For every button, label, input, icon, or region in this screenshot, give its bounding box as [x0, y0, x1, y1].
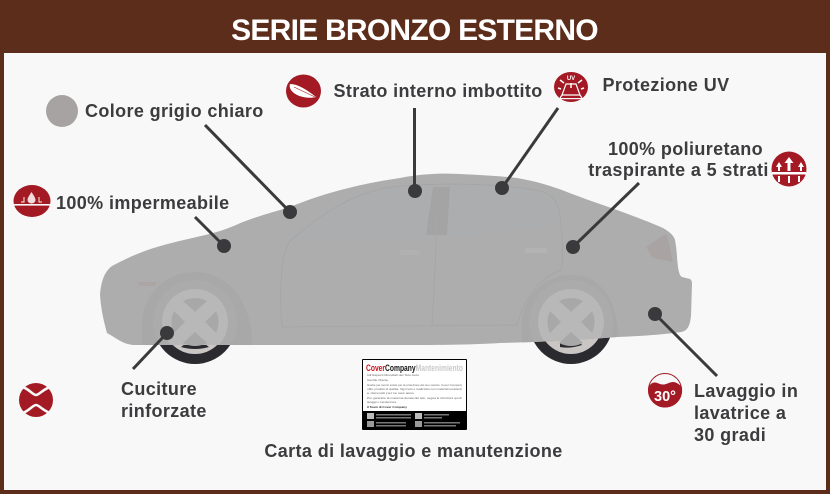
leader lines	[133, 108, 717, 376]
icon: breathable layers	[772, 152, 806, 186]
care card: CoverCompanyMantenimiento	[366, 363, 463, 373]
icon: grey colour swatch	[46, 95, 78, 127]
label: wash	[694, 381, 798, 445]
rear wheel arch	[522, 336, 618, 342]
icon: reinforced seams	[19, 383, 53, 417]
icon: feather	[286, 74, 321, 108]
label: seams	[121, 379, 207, 421]
care card: Gentile Cliente,	[367, 378, 389, 382]
headlight hint	[137, 282, 157, 286]
front wheel arch	[142, 272, 252, 345]
care card: Grazie per averci scelto per la protezione del suo veicolo. Cover Company	[367, 383, 462, 387]
label: colour: Colore grigio chiaro	[85, 101, 264, 121]
label: breathable polyurethane: traspirante a 5 strati	[588, 160, 769, 180]
car body	[100, 174, 692, 345]
icon: 30 degree wash: 30°	[654, 389, 676, 405]
label: breathable polyurethane: 100% poliuretano	[608, 139, 763, 159]
tail light	[646, 235, 673, 262]
label: UV: Protezione UV	[602, 75, 729, 95]
label: wash: lavatrice a	[694, 403, 787, 423]
title: SERIE BRONZO ESTERNO	[231, 14, 598, 47]
care card: lavaggio e manutenzione.	[367, 400, 397, 404]
window and door details	[138, 187, 672, 345]
label: wash: 30 gradi	[694, 425, 766, 445]
rim bottoms	[163, 290, 603, 354]
care card: e durevoli per la sua auto.	[367, 391, 415, 395]
label: breathable polyurethane	[588, 139, 769, 180]
leader dots	[160, 181, 662, 340]
care card	[362, 359, 467, 430]
door handles	[525, 248, 547, 253]
icon: UV protection	[554, 72, 588, 102]
label: waterproof: 100% impermeabile	[56, 193, 230, 213]
label: seams: Cuciture	[121, 379, 197, 399]
icon: UV protection: UV	[567, 76, 575, 82]
label: care card: Carta di lavaggio e manutenzione	[264, 441, 563, 461]
icon: waterproof	[14, 185, 51, 217]
wheel spokes	[172, 298, 594, 346]
label: seams: rinforzate	[121, 401, 207, 421]
label: padded inner layer: Strato interno imbottito	[334, 81, 543, 101]
care card: Per garantire la massima durata del telo, segua le istruzioni qui di	[367, 396, 462, 400]
icon: 30 degree wash	[648, 374, 682, 408]
tyres	[153, 280, 613, 364]
label: wash: Lavaggio in	[694, 381, 798, 401]
care card: Il Team di Cover Company	[367, 405, 407, 409]
car illustration	[100, 174, 692, 364]
care card: Gli Esperti Mondiali del Telo Auto	[367, 373, 419, 377]
care card: offre prodotti di qualita. Ogni telo e realizzato con materiali resistenti	[367, 387, 462, 391]
